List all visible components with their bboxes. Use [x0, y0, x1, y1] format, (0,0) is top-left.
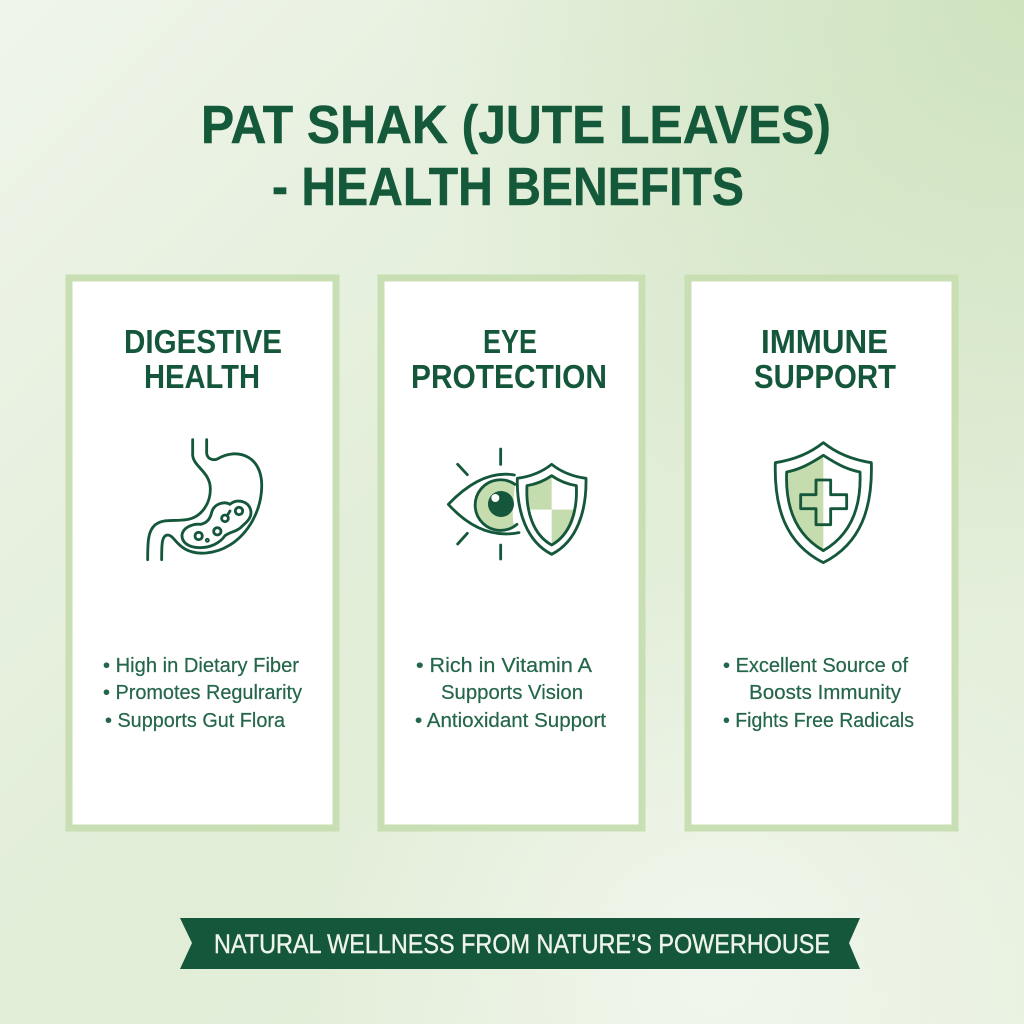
bullet list: digestive health	[103, 655, 302, 732]
banner	[180, 918, 860, 969]
panel: eye protection	[381, 278, 642, 828]
title: - HEALTH BENEFITS	[272, 157, 744, 217]
panel: immune support	[688, 278, 955, 828]
heading: digestive health: HEALTH	[144, 358, 260, 395]
heading: digestive health	[124, 323, 282, 395]
heading: immune support	[754, 323, 896, 395]
title	[201, 95, 831, 217]
panel: digestive health	[69, 278, 336, 828]
heading: eye protection: PROTECTION	[411, 358, 607, 395]
bullet list: immune support	[723, 655, 914, 732]
bullet list: digestive health: • Promotes Regulrarity	[103, 682, 302, 704]
bullet list: digestive health: • High in Dietary Fiber	[103, 655, 299, 677]
icon: shield with cross	[775, 443, 871, 563]
bullet list: digestive health: • Supports Gut Flora	[105, 710, 286, 732]
heading: immune support: IMMUNE	[761, 323, 888, 360]
icon: stomach	[148, 440, 262, 560]
title: PAT SHAK (JUTE LEAVES)	[201, 95, 831, 155]
heading: eye protection: EYE	[483, 323, 537, 360]
bullet list: immune support: Boosts Immunity	[749, 682, 901, 704]
heading: digestive health: DIGESTIVE	[124, 323, 282, 360]
bullet list: eye protection: Supports Vision	[441, 682, 583, 704]
heading: immune support: SUPPORT	[754, 358, 896, 395]
bullet list: eye protection: • Rich in Vitamin A	[416, 655, 593, 677]
bullet list: immune support: • Fights Free Radicals	[723, 710, 914, 732]
banner: NATURAL WELLNESS FROM NATURE’S POWERHOUSE	[214, 929, 830, 959]
icon: eye with shield	[448, 449, 586, 559]
bullet list: eye protection	[415, 655, 606, 732]
bullet list: eye protection: • Antioxidant Support	[415, 710, 606, 732]
heading: eye protection	[411, 323, 607, 395]
bullet list: immune support: • Excellent Source of	[723, 655, 908, 677]
